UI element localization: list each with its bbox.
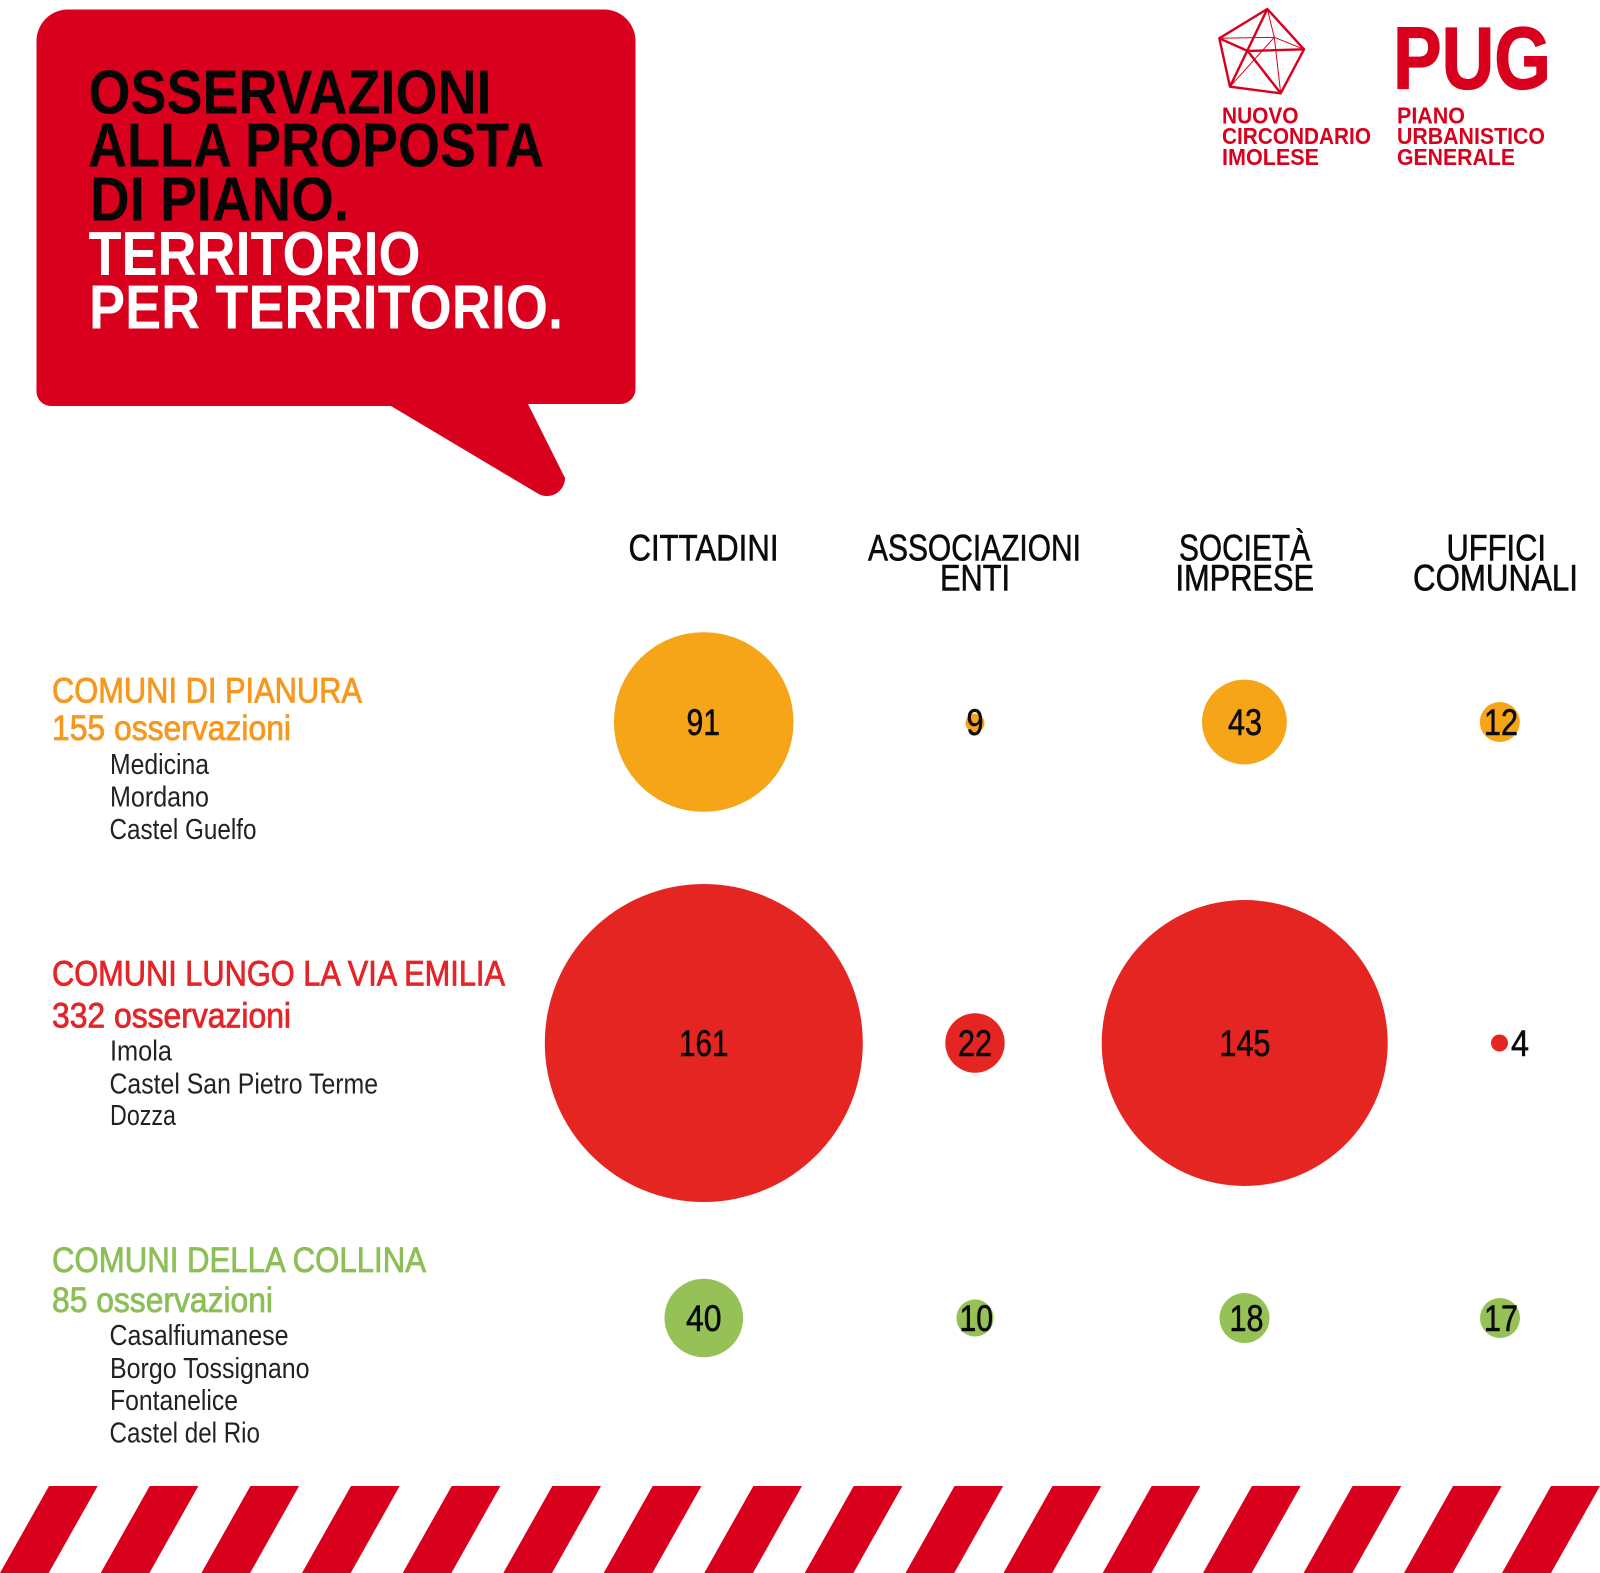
striped band <box>0 1486 1600 1573</box>
row label: Comuni lungo la via Emilia: 332 osservazioni <box>52 997 291 1036</box>
logo: Nuovo Circondario Imolese <box>1219 9 1371 170</box>
title: black lines: ALLA PROPOSTA <box>88 112 544 181</box>
logo text: Piano Urbanistico Generale <box>1397 102 1545 170</box>
column heading: Società Imprese: IMPRESE <box>1176 558 1314 599</box>
logo wordmark: PUG: PUG <box>1393 8 1551 107</box>
municipalities list: via Emilia: Dozza <box>110 1100 177 1132</box>
bubble: collina cittadini 40: 40 <box>686 1298 722 1339</box>
row label: Comuni della Collina <box>52 1241 427 1449</box>
bubble: via Emilia associazioni 22: 22 <box>958 1023 992 1064</box>
title: white lines: PER TERRITORIO. <box>89 273 563 342</box>
bubble: pianura società 43 <box>1202 680 1287 764</box>
bubble: via Emilia società 145: 145 <box>1220 1023 1270 1064</box>
bubble: pianura associazioni 9: 9 <box>966 702 984 743</box>
bubble: via Emilia uffici 4 <box>1491 1023 1529 1064</box>
column heading: Società Imprese: SOCIETÀ <box>1179 528 1310 569</box>
bubble: via Emilia uffici 4: 4 <box>1511 1023 1529 1064</box>
row label: Comuni di Pianura: 155 osservazioni <box>52 709 291 748</box>
panel: title speech bubble <box>36 10 636 496</box>
column heading: Associazioni Enti <box>868 528 1081 599</box>
row label: Comuni lungo la via Emilia: COMUNI LUNGO LA VIA EMILIA <box>52 955 506 994</box>
bubble: collina società 18: 18 <box>1230 1298 1264 1339</box>
municipalities list: via Emilia: Imola <box>110 1036 173 1068</box>
logo text: Piano Urbanistico Generale: GENERALE <box>1397 144 1515 170</box>
municipalities list: collina: Castel del Rio <box>110 1417 260 1449</box>
logo text: Piano Urbanistico Generale: PIANO <box>1397 102 1465 128</box>
row label: Comuni lungo la via Emilia <box>52 955 506 1132</box>
title: black lines: OSSERVAZIONI <box>88 58 492 127</box>
bubble: collina cittadini 40 <box>664 1279 743 1357</box>
logo text: Nuovo Circondario Imolese: NUOVO <box>1222 102 1298 128</box>
column heading: Cittadini: CITTADINI <box>628 528 778 569</box>
bubble: via Emilia cittadini 161 <box>545 884 863 1202</box>
bubble: via Emilia cittadini 161: 161 <box>679 1023 728 1064</box>
logo text: Nuovo Circondario Imolese <box>1222 102 1371 170</box>
logo text: Nuovo Circondario Imolese: IMOLESE <box>1222 144 1319 170</box>
column heading: Uffici Comunali: UFFICI <box>1446 528 1546 569</box>
municipalities list: pianura: Mordano <box>110 782 209 814</box>
municipalities list: collina: Borgo Tossignano <box>110 1353 310 1385</box>
municipalities list: pianura <box>110 749 256 846</box>
bubble: collina società 18 <box>1220 1293 1270 1343</box>
icon: wireframe pentagon <box>1219 9 1304 93</box>
row label: Comuni della Collina: COMUNI DELLA COLLINA <box>52 1241 427 1280</box>
bubble: via Emilia società 145 <box>1102 900 1388 1186</box>
logo text: Nuovo Circondario Imolese: CIRCONDARIO <box>1222 123 1371 149</box>
bubble: pianura cittadini 91: 91 <box>686 702 720 743</box>
municipalities list: collina <box>110 1320 310 1449</box>
bubble: collina associazioni 10: 10 <box>960 1298 993 1339</box>
bubble: pianura uffici 12: 12 <box>1484 702 1518 743</box>
bubble: pianura cittadini 91 <box>614 632 794 812</box>
bubble: collina uffici 17: 17 <box>1484 1298 1518 1339</box>
logo text: Piano Urbanistico Generale: URBANISTICO <box>1397 123 1545 149</box>
bubble: via Emilia associazioni 22 <box>945 1013 1005 1073</box>
column heading: Associazioni Enti: ASSOCIAZIONI <box>868 528 1081 569</box>
municipalities list: collina: Casalfiumanese <box>110 1320 288 1352</box>
bubble: pianura società 43: 43 <box>1228 702 1262 743</box>
title: black lines <box>88 58 544 235</box>
municipalities list: pianura: Castel Guelfo <box>110 814 256 846</box>
title: black lines: DI PIANO. <box>90 166 349 235</box>
column heading: Associazioni Enti: ENTI <box>940 558 1010 599</box>
title: white lines <box>88 220 563 342</box>
municipalities list: via Emilia: Castel San Pietro Terme <box>110 1068 378 1100</box>
row label: Comuni della Collina: 85 osservazioni <box>52 1281 273 1320</box>
logo: PUG Piano Urbanistico Generale <box>1393 8 1551 170</box>
title: white lines: TERRITORIO <box>88 220 420 289</box>
municipalities list: via Emilia <box>110 1036 378 1132</box>
row label: Comuni di Pianura: COMUNI DI PIANURA <box>52 672 363 711</box>
municipalities list: collina: Fontanelice <box>110 1385 238 1417</box>
row label: Comuni di Pianura <box>52 672 363 846</box>
municipalities list: pianura: Medicina <box>110 749 210 781</box>
column heading: Uffici Comunali <box>1413 528 1578 599</box>
column heading: Società Imprese <box>1176 528 1314 599</box>
